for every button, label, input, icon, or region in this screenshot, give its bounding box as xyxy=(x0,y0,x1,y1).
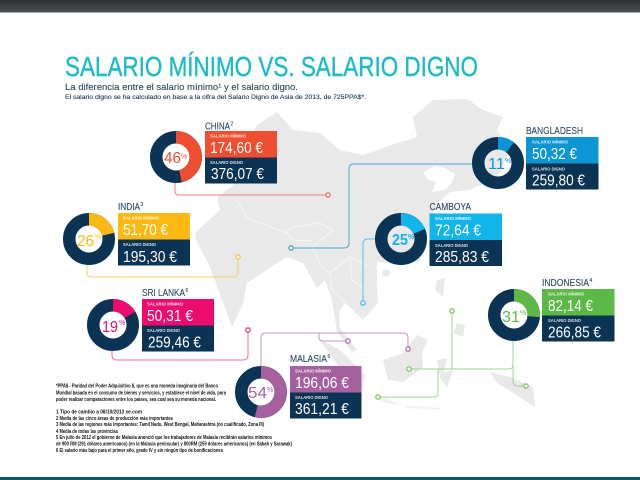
card: Indonesia living wage: 266,85 € xyxy=(548,324,601,342)
donut: China 46% xyxy=(156,137,196,177)
percent: Camboya: 25 xyxy=(392,232,408,249)
panel: India xyxy=(69,202,190,266)
footnotes xyxy=(56,384,292,454)
card: Camboya minimum: 72,64 € xyxy=(435,222,481,240)
bottom bar xyxy=(0,477,640,480)
card: Indonesia minimum: 82,14 € xyxy=(548,298,593,315)
heading: Indonesia: 4 xyxy=(590,278,592,284)
card: Camboya minimum: SALARIO MÍNIMO xyxy=(435,214,471,221)
percent: Malasia xyxy=(248,385,273,402)
card: Indonesia minimum: SALARIO MÍNIMO xyxy=(548,290,584,296)
percent: Bangladesh: % xyxy=(505,158,511,165)
card: India minimum: 51,70 € xyxy=(123,222,168,239)
card: India living wage xyxy=(118,240,190,266)
panel: China xyxy=(156,122,277,184)
heading: China: 2 xyxy=(230,122,234,128)
heading: Camboya: CAMBOYA xyxy=(430,202,471,213)
donut: Bangladesh 11% xyxy=(478,143,518,183)
card: Indonesia minimum xyxy=(542,289,614,316)
card: Sri Lanka living wage: 259,46 € xyxy=(148,334,201,352)
card: China minimum: 174,60 € xyxy=(210,140,263,157)
percent: China: 46 xyxy=(164,150,181,167)
footnotes: de 900 RM (291 dólares americanos) (en la Malasia peninsular) y 800RM (259 dólares americanos) (en Sabah y Sarawak) xyxy=(56,442,292,448)
percent: Sri Lanka: % xyxy=(119,320,125,327)
percent: Malasia: 54 xyxy=(248,385,267,402)
footnotes: *PPA$ - Paridad del Poder Adquisitivo $, que es una moneda imaginaria del Banco xyxy=(56,384,218,390)
percent: Bangladesh: 11 xyxy=(488,156,505,173)
card: Bangladesh living wage xyxy=(526,164,598,190)
panel: Sri Lanka xyxy=(93,288,214,352)
donut: India 26% xyxy=(69,219,109,259)
connector: Sri Lanka xyxy=(112,328,250,360)
card: Malasia minimum xyxy=(290,366,362,392)
heading: Malasia: 5 xyxy=(328,354,330,360)
footnotes: 6 El salario más bajo para el primer año, grado IV y sin ningún tipo de bonificaciones xyxy=(56,448,223,454)
card: Bangladesh minimum: SALARIO MÍNIMO xyxy=(532,138,568,144)
connector: India xyxy=(87,255,240,277)
footnotes: Mundial basada en el consumo de bienes y servicios, y establece el nivel de vida, para xyxy=(56,390,226,396)
card: Bangladesh living wage: 259,80 € xyxy=(532,172,585,190)
connector: Indonesia xyxy=(376,309,528,399)
percent: India: % xyxy=(95,234,101,241)
percent: Indonesia: 31 xyxy=(502,309,520,326)
subtitle note: El salario digno se ha calculado en base a la cifra del Salario Digno de Asia de 2013, de 725PPA$*. xyxy=(65,94,366,101)
percent: Sri Lanka: 19 xyxy=(102,319,118,336)
card: Malasia living wage: 361,21 € xyxy=(295,401,349,418)
card: Camboya minimum xyxy=(430,214,502,240)
footnotes: 2 Media de las cinco áreas de producción más importantes xyxy=(56,416,173,422)
top bar xyxy=(0,0,640,12)
percent: China: % xyxy=(181,154,187,160)
card: Camboya living wage: 285,83 € xyxy=(435,249,489,266)
card: India minimum: SALARIO MÍNIMO xyxy=(123,214,159,220)
donut: Indonesia 31% xyxy=(494,295,534,335)
connector: Bangladesh xyxy=(289,164,472,250)
card: Camboya living wage: SALARIO DIGNO xyxy=(435,243,468,248)
footnotes: 1 Tipo de cambio a 08/10/2013 xe.com xyxy=(56,410,143,416)
connector: Camboya xyxy=(361,239,375,305)
percent: Camboya: % xyxy=(408,234,415,241)
card: Bangladesh minimum xyxy=(526,137,598,164)
card: Malasia living wage xyxy=(290,392,362,418)
card: China living wage: 376,07 € xyxy=(211,166,264,183)
card: Indonesia living wage xyxy=(542,316,614,342)
title: SALARIO MÍNIMO VS. SALARIO DIGNO xyxy=(65,51,478,82)
percent: Malasia: % xyxy=(267,387,273,394)
footnotes: 3 Media de las regiones más importantes: Tamil Nadu, West Bengal, Maharashtra (no cualificado, Zona III) xyxy=(56,422,264,428)
card: Malasia living wage: SALARIO DIGNO xyxy=(295,395,328,400)
panel: Camboya xyxy=(381,202,502,266)
card: Sri Lanka living wage xyxy=(142,326,214,352)
card: Malasia minimum: SALARIO MÍNIMO xyxy=(295,366,331,374)
card: China minimum: SALARIO MÍNIMO xyxy=(210,132,246,138)
heading: Sri Lanka: SRI LANKA xyxy=(142,288,185,299)
donut: Sri Lanka 19% xyxy=(93,305,133,345)
card: Indonesia living wage: SALARIO DIGNO xyxy=(548,318,581,323)
panel: Indonesia xyxy=(494,278,614,342)
card: Sri Lanka minimum: 50,31 € xyxy=(147,308,193,325)
heading: China: CHINA xyxy=(205,122,230,132)
card: Sri Lanka minimum xyxy=(142,299,214,326)
card: India living wage: SALARIO DIGNO xyxy=(123,242,156,247)
card: Sri Lanka living wage: SALARIO DIGNO xyxy=(147,328,180,333)
percent: Bangladesh xyxy=(488,156,511,173)
card: China living wage: SALARIO DIGNO xyxy=(210,160,243,165)
heading: India: 3 xyxy=(140,202,144,208)
card: Bangladesh minimum: 50,32 € xyxy=(532,146,577,163)
subtitle: La diferencia entre el salario mínimo¹ y el salario digno. xyxy=(65,82,298,92)
map of Asia xyxy=(195,99,535,410)
card: Camboya living wage xyxy=(430,240,502,266)
panel: Malasia xyxy=(241,354,362,418)
connector: Malasia xyxy=(261,333,410,366)
heading: Sri Lanka: 6 xyxy=(186,288,188,294)
footnotes: poder realizar comparaciones entre los países, sea cual sea su moneda nacional. xyxy=(56,397,217,403)
heading: Malasia: MALASIA xyxy=(290,354,327,365)
footnotes: 4 Media de todas las provincias xyxy=(56,429,118,435)
card: Malasia minimum: 196,06 € xyxy=(295,375,349,392)
heading: India: INDIA xyxy=(118,202,140,213)
percent: India: 26 xyxy=(77,233,94,250)
heading: Bangladesh: BANGLADESH xyxy=(526,126,583,137)
card: China minimum xyxy=(205,131,277,158)
heading: Indonesia: INDONESIA xyxy=(542,278,589,289)
connector: China xyxy=(175,183,330,197)
card: China living wage xyxy=(205,158,277,184)
card: India living wage: 195,30 € xyxy=(123,249,177,266)
donut: Malasia 54% xyxy=(241,372,281,412)
card: Bangladesh living wage: SALARIO DIGNO xyxy=(532,166,565,172)
percent: Indonesia: % xyxy=(520,310,526,317)
panel: Bangladesh xyxy=(478,126,598,190)
card: Sri Lanka minimum: SALARIO MÍNIMO xyxy=(147,300,183,306)
donut: Camboya 25% xyxy=(381,219,421,259)
footnotes: 5 En julio de 2012 el gobierno de Malasia anunció que los trabajadores de Malasia recibirán salarios mínimos xyxy=(56,435,272,441)
card: India minimum xyxy=(118,213,190,240)
